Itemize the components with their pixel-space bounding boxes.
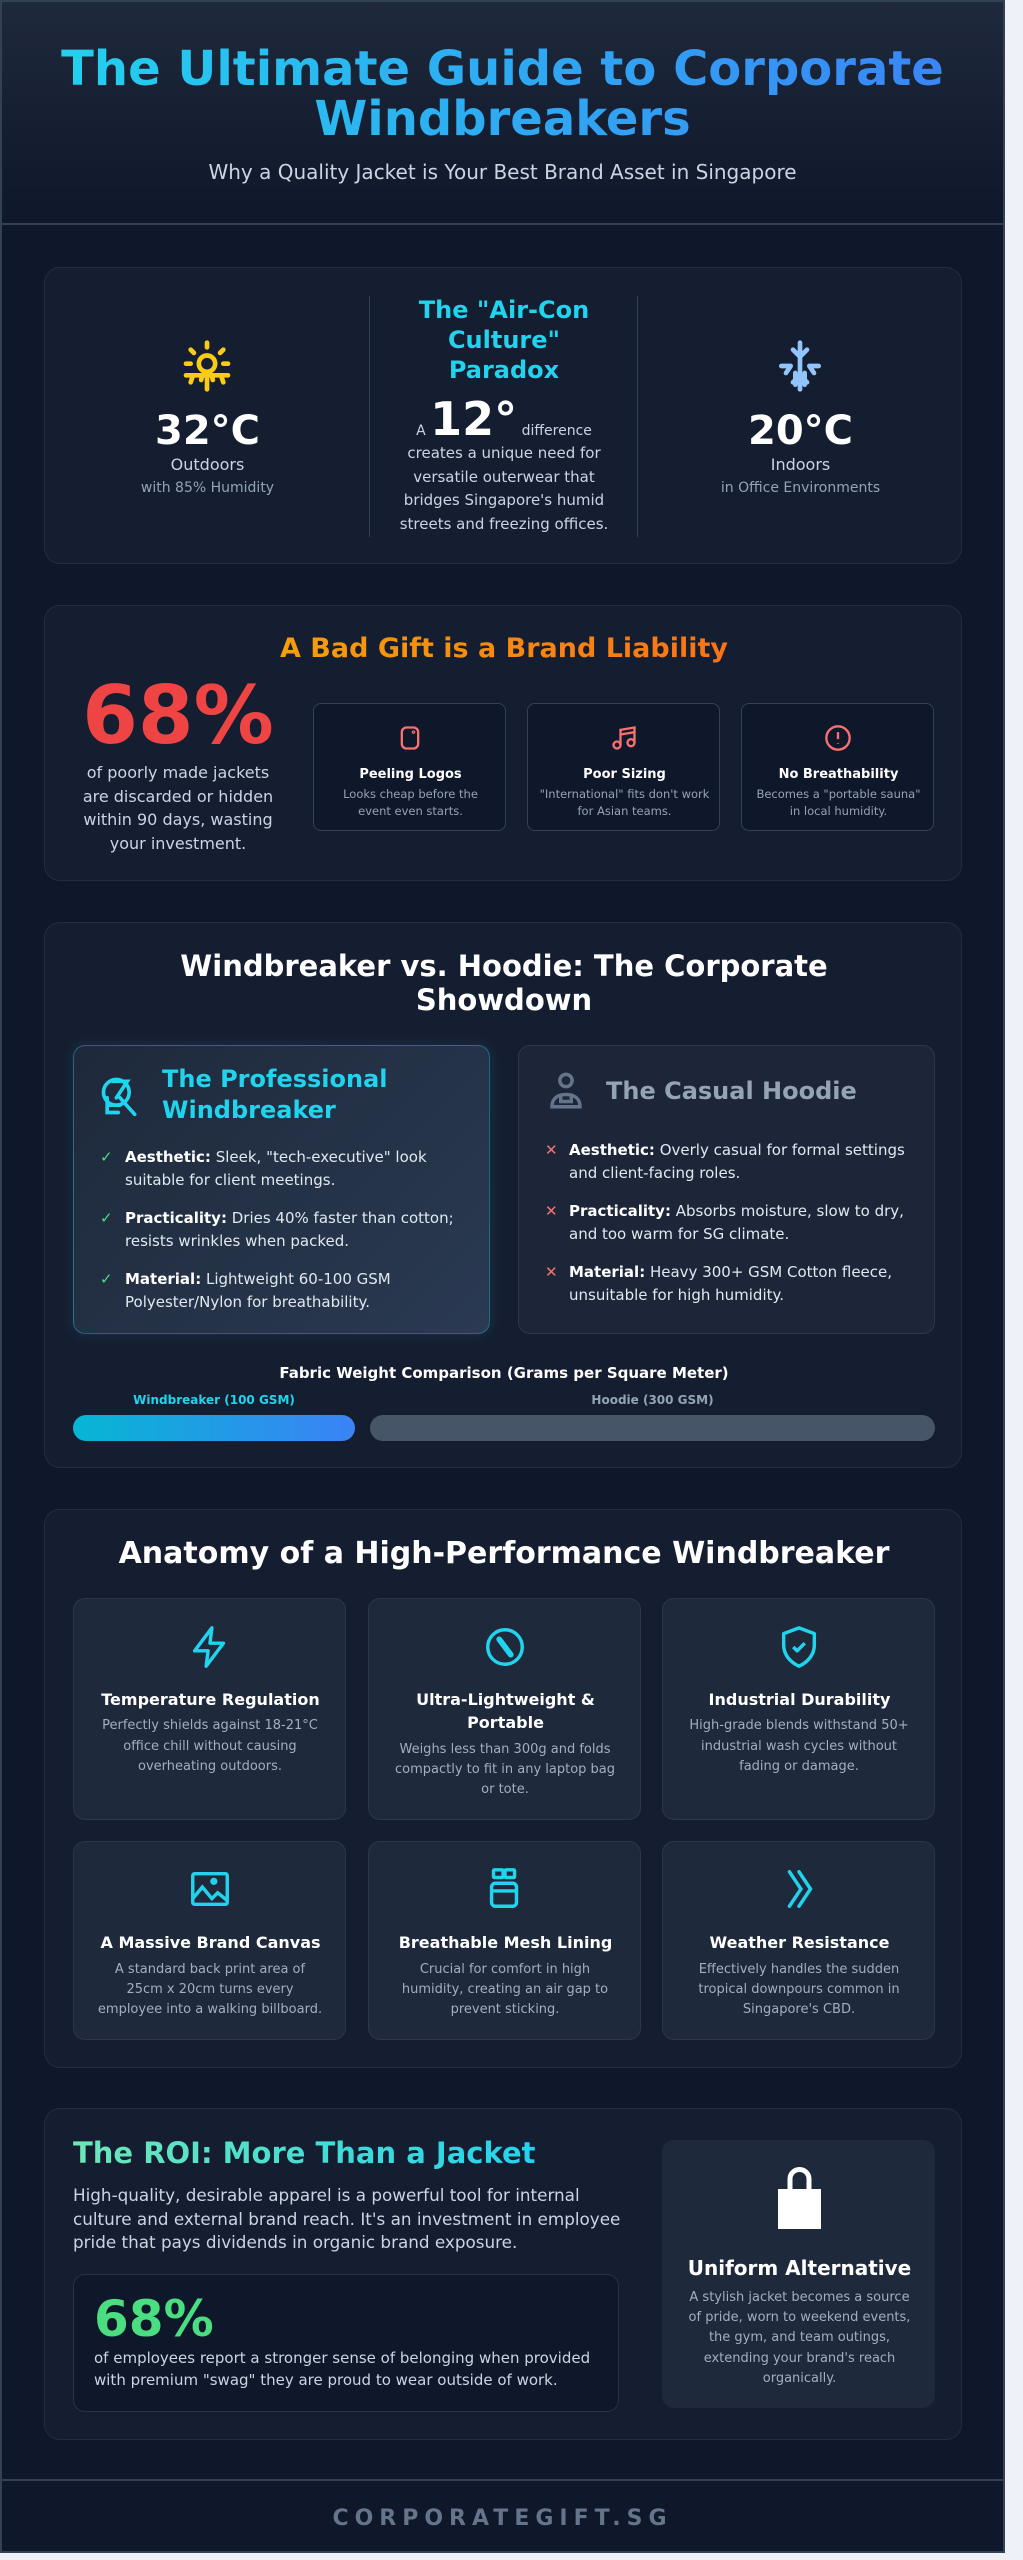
indoor column: in Office Environments [721,480,880,496]
stat: 68% [82,669,274,852]
paradox text: creates a unique need for versatile outerwear that bridges Singapore's humid streets and freezing offices. [400,444,608,532]
card: poor sizing: "International" fits don't work for Asian teams. [540,787,709,818]
icon: windbreaker [102,1078,137,1116]
card: mesh lining: Breathable Mesh Lining [399,1933,612,1952]
middle column: paradox [400,296,608,532]
list: Aesthetic: Sleek, "tech-executive" look suitable for client meetings. [125,1148,427,1189]
indoor column: Indoors [771,455,830,474]
card: mesh lining [368,1841,641,2040]
list [100,1148,454,1311]
panel: ROI [44,2108,962,2440]
header [2,2,1003,225]
heading: The ROI: More Than a Jacket [73,2136,536,2170]
card: brand canvas [73,1841,346,2040]
card: casual hoodie [518,1045,935,1334]
card: peeling logos: Looks cheap before the event even starts. [343,787,478,818]
list: ✓ [100,1270,113,1288]
chart: fabric weight: Windbreaker (100 GSM) [133,1393,295,1407]
card: ultra-lightweight: Ultra-Lightweight & Portable [416,1690,595,1732]
stat: 32C: 32°C [155,408,260,454]
card: poor sizing [527,703,720,831]
chart: fabric weight: Hoodie (300 GSM) [591,1393,714,1407]
card: no breathability: No Breathability [779,767,898,782]
card: professional windbreaker [73,1045,490,1334]
stat: 20C: 20°C [748,408,853,454]
card: poor sizing: Poor Sizing [583,767,666,782]
card: uniform alternative: A stylish jacket becomes a source of pride, worn to weekend events, the gym, and team outings, extending your brand's reach organically. [689,2290,910,2386]
icon: snowflake [779,340,821,392]
panel: air-con paradox [44,267,962,564]
heading: Anatomy of a High-Performance Windbreaker [119,1536,889,1571]
chart: fabric weight [73,1364,935,1441]
title: The Ultimate Guide to Corporate Windbreakers [61,41,944,147]
12 degree stat: A 12° difference [416,392,592,446]
card: weather resistance: Weather Resistance [710,1933,889,1952]
stat box: 68% belonging [73,2274,619,2412]
card: temperature regulation [73,1598,346,1820]
card: no breathability: Becomes a "portable sauna" in local humidity. [756,787,921,818]
title: The Casual Hoodie [606,1077,857,1105]
panel: anatomy [44,1509,962,2068]
list: ✕ [545,1263,558,1281]
card: ultra-lightweight [368,1598,641,1820]
heading: A Bad Gift is a Brand Liability [280,633,728,664]
card: industrial durability [662,1598,935,1820]
card: ultra-lightweight: Weighs less than 300g and folds compactly to fit in any laptop bag or tote. [395,1742,615,1797]
card: uniform alternative: Uniform Alternative [688,2256,911,2280]
chart: fabric weight: Fabric Weight Comparison (Grams per Square Meter) [279,1364,729,1382]
outdoor column: Outdoors [171,455,244,474]
list: Aesthetic: Overly casual for formal settings and client-facing roles. [569,1141,905,1182]
paragraph: High-quality, desirable apparel is a powerful tool for internal culture and external brand reach. It's an investment in employee pride that pays dividends in organic brand exposure. [73,2185,620,2252]
outdoor column [141,340,274,496]
stat: 68%: of poorly made jackets are discarded or hidden within 90 days, wasting your investment. [83,763,273,852]
card: weather resistance: Effectively handles the sudden tropical downpours common in Singapore's CBD. [698,1962,900,2017]
card: mesh lining: Crucial for comfort in high humidity, creating an air gap to prevent sticking. [402,1962,608,2017]
indoor column [721,340,880,496]
icon: sun [184,340,230,392]
card: peeling logos [313,703,506,831]
stat box: 68% belonging: of employees report a stronger sense of belonging when provided with premium "swag" they are proud to wear outside of work. [94,2349,590,2389]
list: ✓ [100,1209,113,1227]
outdoor column: with 85% Humidity [141,480,274,496]
icon [612,726,636,750]
card: temperature regulation: Temperature Regulation [101,1690,320,1709]
footer [2,2479,1003,2553]
card: industrial durability: High-grade blends withstand 50+ industrial wash cycles without fading or damage. [689,1718,909,1774]
card: industrial durability: Industrial Durability [709,1690,890,1709]
icon [400,726,420,750]
card: no breathability [741,703,934,831]
footer: CORPORATEGIFT.SG [332,2506,673,2531]
panel: windbreaker vs hoodie [44,922,962,1468]
list: Material: Lightweight 60-100 GSM Polyester/Nylon for breathability. [125,1270,391,1311]
card: temperature regulation: Perfectly shields against 18-21°C office chill without causing overheating outdoors. [102,1718,318,1774]
heading: Windbreaker vs. Hoodie: The Corporate Showdown [180,949,828,1017]
icon: bag [778,2167,821,2229]
title: The Professional Windbreaker [162,1065,388,1124]
icon: user [550,1072,582,1108]
paradox heading: The "Air-Con Culture" Paradox [419,296,589,384]
card: brand canvas: A Massive Brand Canvas [100,1933,321,1952]
stat: 68%: 68% [82,669,274,762]
card: brand canvas: A standard back print area of 25cm x 20cm turns every employee into a walking billboard. [98,1962,322,2017]
list: Material: Heavy 300+ GSM Cotton fleece, unsuitable for high humidity. [569,1263,892,1304]
list: Practicality: Absorbs moisture, slow to dry, and too warm for SG climate. [569,1202,904,1243]
list: Practicality: Dries 40% faster than cotton; resists wrinkles when packed. [125,1209,454,1250]
card: peeling logos: Peeling Logos [359,767,462,782]
card: uniform alternative [662,2140,935,2408]
subtitle: Why a Quality Jacket is Your Best Brand Asset in Singapore [208,160,797,184]
panel: bad gift [44,605,962,881]
card: weather resistance [662,1841,935,2040]
list [545,1141,905,1304]
list: ✓ [100,1148,113,1166]
icon [825,725,851,751]
stat box: 68% belonging: 68% [94,2290,214,2348]
list: ✕ [545,1202,558,1220]
list: ✕ [545,1141,558,1159]
